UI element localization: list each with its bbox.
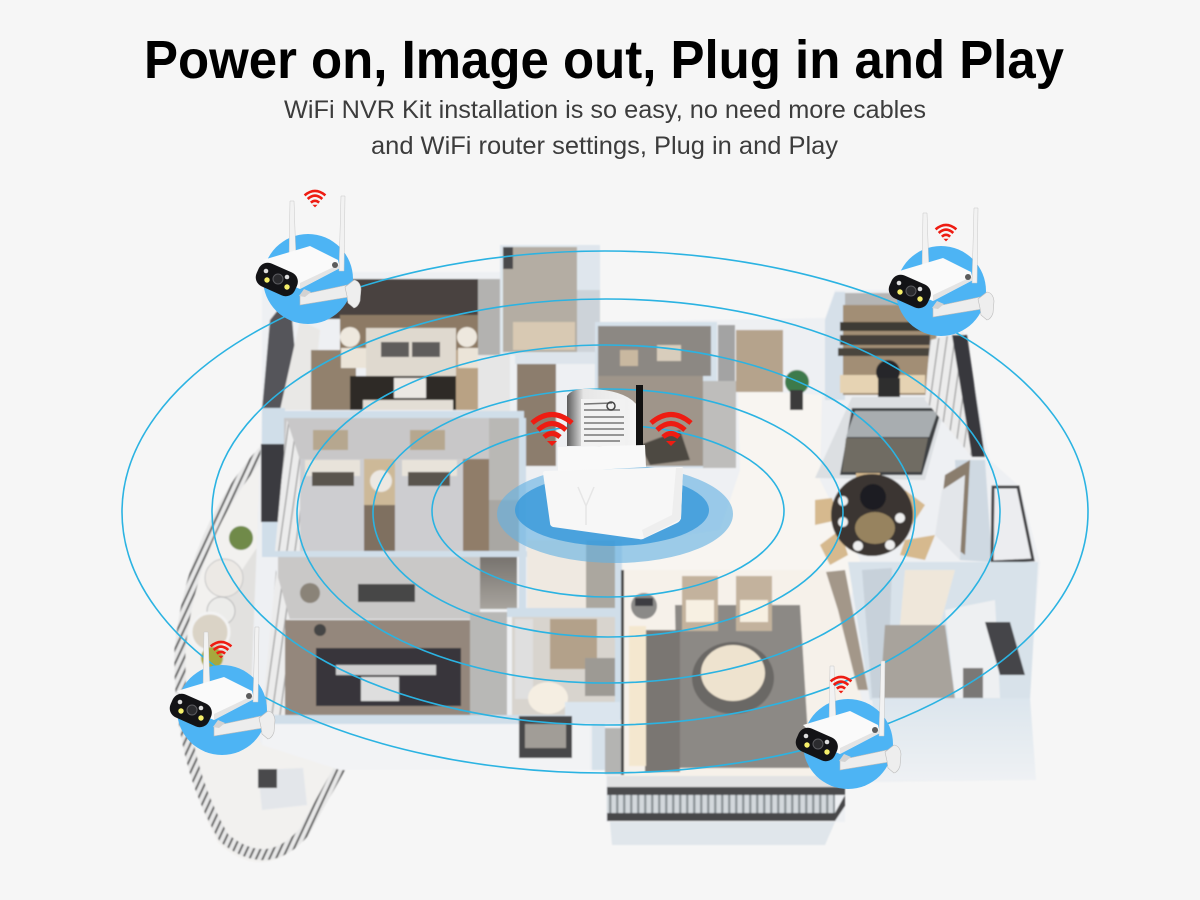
cream hallway floor: [622, 390, 860, 606]
building base: [250, 245, 1040, 822]
icon: wifi top left camera: [305, 191, 325, 207]
wall fade lower: [262, 718, 590, 770]
WiFi NVR with hard drive: [543, 385, 683, 539]
lower balcony with railing: [607, 776, 845, 845]
room: lower right kitchen: [848, 562, 1038, 780]
icon: wifi bottom left camera: [211, 642, 231, 658]
room: second bedroom: [261, 408, 524, 554]
title: Power on, Image out, Plug in and Play: [144, 30, 1064, 90]
icon: wifi bottom right camera: [831, 677, 851, 693]
icon: NVR wifi right: [651, 414, 691, 446]
potted plant: [785, 370, 809, 410]
camera: top left: [253, 196, 361, 324]
room: right study with shelves: [815, 292, 1033, 562]
room: lower-left living room: [262, 418, 592, 724]
concentric signal rings: [122, 251, 1088, 773]
room: centre study behind NVR: [595, 322, 783, 468]
room: bathroom top: [500, 245, 600, 364]
icon: wifi top right camera: [936, 225, 956, 241]
apartment floor plan: [176, 245, 1040, 862]
subtitle: WiFi NVR Kit installation is so easy, no need more cables: [284, 96, 926, 124]
living room with rug, sofa and table: [621, 570, 868, 778]
balcony with curved railing: [176, 447, 345, 862]
NVR hub base glow: [497, 465, 733, 563]
room: lower bathroom: [512, 617, 625, 774]
subtitle: and WiFi router settings, Plug in and Play: [371, 132, 839, 160]
corridor door: [517, 364, 556, 466]
room: master bedroom: [262, 279, 510, 412]
camera: top right: [886, 208, 994, 336]
subtitle: [284, 96, 926, 160]
camera: bottom left: [167, 627, 275, 755]
icon: NVR wifi left: [532, 414, 572, 446]
cream corridor and column: [507, 540, 622, 720]
camera: bottom right: [793, 661, 901, 789]
dining table: [815, 473, 935, 565]
